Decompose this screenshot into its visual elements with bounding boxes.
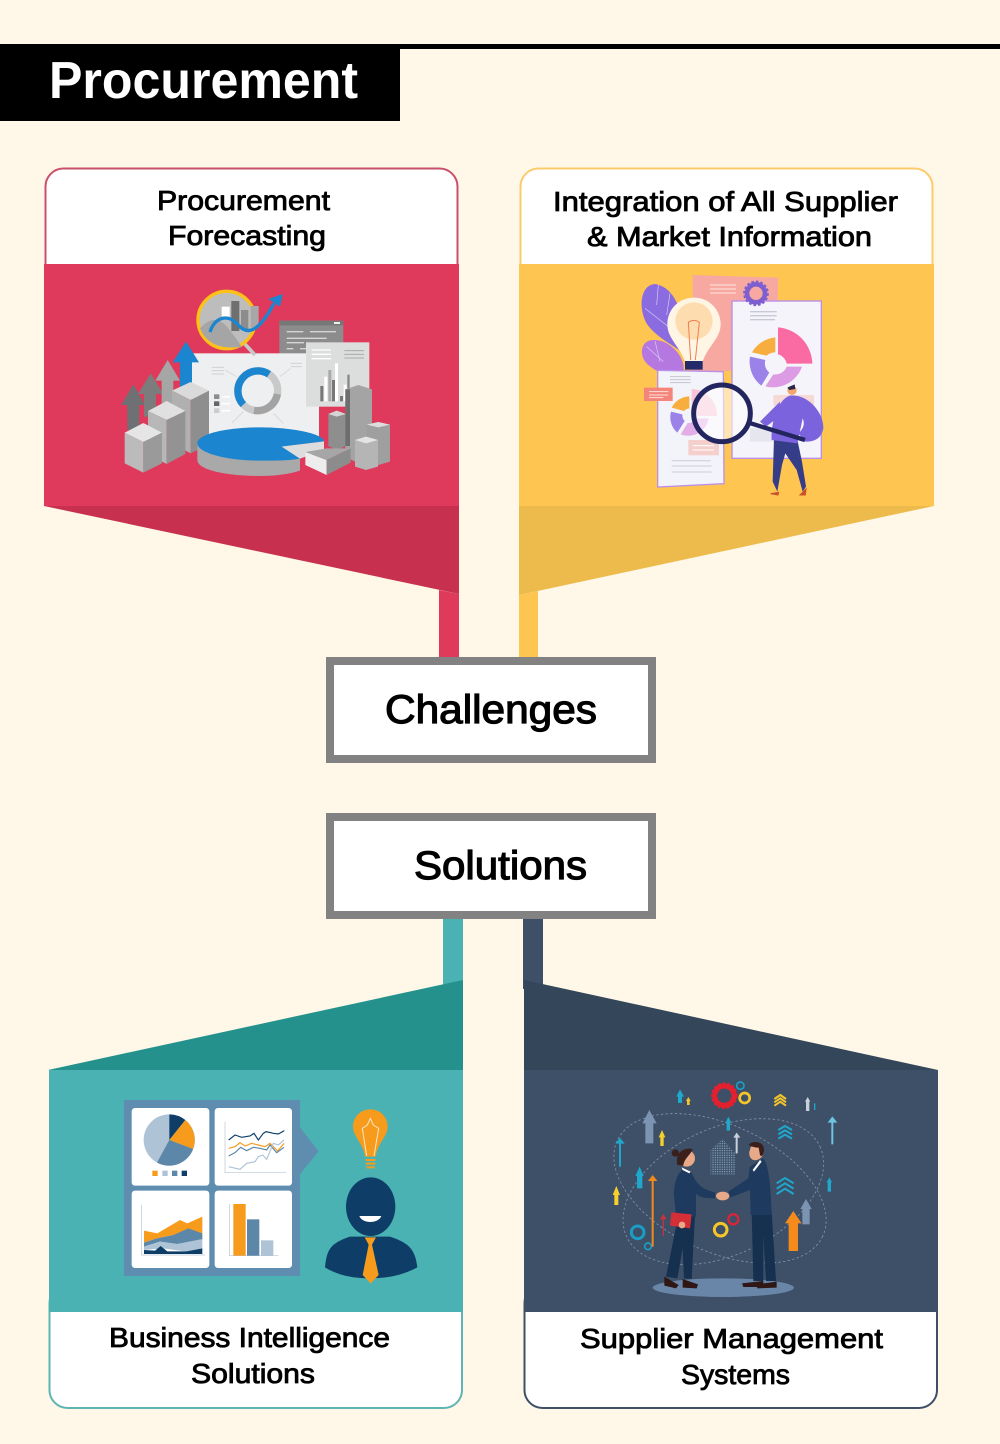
icon: analytics charts illustration bbox=[121, 291, 390, 476]
label: solutions bbox=[330, 817, 652, 915]
heading: business intelligence solutions: Business Intelligence bbox=[109, 1322, 390, 1353]
magnifying glass bbox=[694, 385, 805, 442]
person bbox=[760, 384, 823, 495]
leaves bbox=[642, 284, 684, 374]
heading: integration of all supplier: Integration of All Supplier bbox=[553, 186, 898, 217]
heading: supplier management systems: Supplier Management bbox=[580, 1323, 883, 1354]
panel: procurement forecasting bbox=[44, 168, 459, 657]
magnifier with rising arrow bbox=[198, 291, 283, 355]
upward arrows bbox=[613, 1089, 837, 1251]
label: challenges: Challenges bbox=[385, 688, 597, 732]
chevrons bbox=[774, 1095, 794, 1194]
dashboard board bbox=[124, 1100, 319, 1276]
heading: procurement forecasting: Forecasting bbox=[168, 220, 326, 251]
icon: data review illustration bbox=[642, 275, 823, 495]
idea bulb bbox=[353, 1109, 388, 1167]
dotted building bbox=[711, 1139, 735, 1174]
pie chart bbox=[144, 1114, 195, 1176]
heading: procurement forecasting: Procurement bbox=[157, 185, 330, 216]
gear bbox=[744, 281, 768, 305]
floor ellipse bbox=[653, 1278, 794, 1297]
title banner bbox=[0, 44, 1000, 121]
line chart bbox=[225, 1122, 286, 1173]
clasped hands bbox=[716, 1192, 729, 1200]
dashed orbit lines bbox=[591, 1083, 849, 1294]
isometric blocks bbox=[125, 382, 209, 473]
heading: integration of all supplier bbox=[553, 186, 898, 252]
panel: supplier and market integration bbox=[519, 168, 934, 657]
icon: business handshake illustration bbox=[591, 1082, 849, 1297]
analyst figure bbox=[325, 1177, 417, 1283]
panel: supplier management systems bbox=[523, 919, 938, 1408]
heading: business intelligence solutions: Solutions bbox=[191, 1358, 315, 1389]
heading: business intelligence solutions bbox=[109, 1322, 390, 1389]
panel: business intelligence solutions bbox=[48, 919, 463, 1408]
hexagonal columns bbox=[305, 385, 390, 475]
3d pie chart bbox=[197, 427, 324, 476]
rising arrows bbox=[121, 342, 199, 430]
label: solutions: Solutions bbox=[414, 844, 587, 888]
heading: supplier management systems: Systems bbox=[681, 1359, 790, 1390]
right sheet with pie chart bbox=[732, 301, 821, 458]
title banner: Procurement bbox=[49, 52, 358, 110]
donut chart bbox=[238, 371, 278, 411]
heading: supplier management systems bbox=[580, 1323, 883, 1390]
heading: integration of all supplier: & Market Information bbox=[587, 221, 872, 252]
area chart bbox=[142, 1205, 205, 1255]
left sheet with pie chart bbox=[644, 370, 724, 487]
bar chart bbox=[229, 1204, 278, 1256]
gears bbox=[631, 1082, 750, 1250]
businessman bbox=[728, 1142, 777, 1288]
heading: procurement forecasting bbox=[157, 185, 330, 251]
icon: dashboard and analyst illustration bbox=[124, 1100, 417, 1283]
light bulb bbox=[667, 298, 721, 370]
businesswoman bbox=[664, 1149, 715, 1288]
label: challenges bbox=[330, 661, 652, 759]
